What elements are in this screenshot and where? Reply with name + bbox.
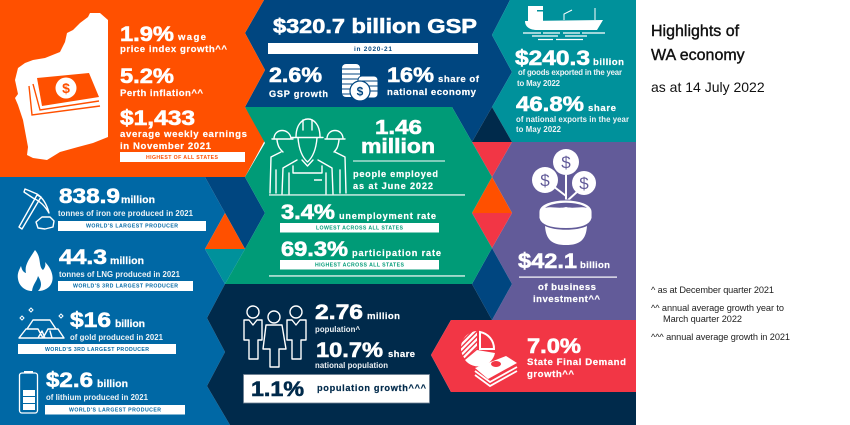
unemployment rate: LOWEST ACROSS ALL STATES xyxy=(316,226,404,232)
gold tag: WORLD'S 3RD LARGEST PRODUCER xyxy=(45,347,149,353)
icon: money plant: $ xyxy=(540,171,550,190)
population: million xyxy=(367,311,400,322)
LNG: million xyxy=(110,255,144,267)
goods exported: $240.3 xyxy=(515,47,590,70)
title xyxy=(651,23,745,64)
population share: share xyxy=(388,349,415,360)
state final demand xyxy=(527,335,626,380)
footnotes: March quarter 2022 xyxy=(663,314,742,324)
LNG tag: WORLD'S 3RD LARGEST PRODUCER xyxy=(73,284,178,290)
weekly earnings xyxy=(120,107,247,152)
earnings tag: HIGHEST OF ALL STATES xyxy=(146,155,219,161)
national economy share xyxy=(387,64,480,98)
population growth box: 1.1% xyxy=(251,378,304,401)
participation rate: HIGHEST ACROSS ALL STATES xyxy=(315,262,405,268)
iron ore xyxy=(58,185,194,218)
panel: purple investment xyxy=(492,142,636,320)
national economy share: 16% xyxy=(387,64,434,87)
triangles: left connector xyxy=(205,177,265,284)
wage index: wage xyxy=(177,32,206,43)
panel: blue resources xyxy=(0,177,230,425)
export share: share xyxy=(588,103,616,114)
wage index: price index growth^^ xyxy=(120,44,227,55)
gold tag xyxy=(18,344,176,354)
LNG: 44.3 xyxy=(59,246,107,269)
LNG tag xyxy=(58,281,193,291)
unemployment rate xyxy=(280,201,439,232)
GSP growth: GSP growth xyxy=(269,89,328,99)
GSP period bar xyxy=(268,43,478,54)
population xyxy=(315,301,400,334)
state final demand: 7.0% xyxy=(527,335,581,358)
icon: pie chart and cash xyxy=(461,331,517,386)
people employed: million xyxy=(361,136,435,158)
lithium tag: WORLD'S LARGEST PRODUCER xyxy=(69,408,161,414)
wage index xyxy=(120,23,227,55)
panel: orange wages xyxy=(0,0,265,177)
business investment: investment^^ xyxy=(533,294,600,305)
people employed xyxy=(353,117,445,191)
business investment: billion xyxy=(580,260,610,271)
GSP heading: $320.7 billion GSP xyxy=(273,16,477,38)
panel: green employment xyxy=(225,107,492,284)
icon: battery xyxy=(20,371,38,413)
iron ore: 838.9 xyxy=(59,185,120,208)
participation rate: participation rate xyxy=(352,248,441,258)
weekly earnings: average weekly earnings xyxy=(120,129,247,140)
inflation: Perth inflation^^ xyxy=(120,88,203,99)
GSP growth: 2.6% xyxy=(269,64,322,87)
inflation: 5.2% xyxy=(120,65,174,88)
GSP period bar: in 2020-21 xyxy=(354,46,392,53)
icon: flame xyxy=(18,250,53,291)
people employed: 1.46 xyxy=(375,117,422,139)
icon: coins: $ xyxy=(357,84,364,98)
export share: 46.8% xyxy=(516,93,584,116)
wage index: 1.9% xyxy=(120,23,174,46)
lithium: billion xyxy=(97,378,128,390)
icon: people xyxy=(244,306,306,367)
weekly earnings: $1,433 xyxy=(120,107,195,130)
footnotes: ^ as at December quarter 2021 xyxy=(651,285,774,295)
gold: of gold produced in 2021 xyxy=(70,333,164,342)
export share xyxy=(516,93,629,134)
panel: red state final demand xyxy=(431,320,636,392)
unemployment rate: unemployment rate xyxy=(339,211,436,221)
lithium: $2.6 xyxy=(46,369,93,392)
gold: billion xyxy=(115,318,145,330)
icon: pickaxe and ore xyxy=(19,189,54,229)
goods exported: billion xyxy=(593,57,624,68)
iron ore: million xyxy=(121,194,155,206)
population growth box xyxy=(244,374,430,403)
population growth box: population growth^^^ xyxy=(317,383,427,393)
title: WA economy xyxy=(651,47,745,64)
icon: coins xyxy=(342,64,378,101)
goods exported: to May 2022 xyxy=(517,79,561,88)
icon: WA map with money xyxy=(15,13,108,160)
population: 2.76 xyxy=(315,301,363,324)
footnotes: ^^ annual average growth year to xyxy=(651,303,784,313)
icon: ship xyxy=(523,6,605,40)
business investment: of business xyxy=(538,282,596,293)
inflation xyxy=(120,65,203,99)
footnotes: ^^^ annual average growth in 2021 xyxy=(651,332,790,342)
lithium xyxy=(46,369,149,402)
export share: of national exports in the year xyxy=(516,115,629,124)
people employed: as at June 2022 xyxy=(353,181,433,191)
iron ore tag: WORLD'S LARGEST PRODUCER xyxy=(86,224,178,230)
business investment xyxy=(518,250,617,305)
icon: workers xyxy=(270,119,346,194)
goods exported: of goods exported in the year xyxy=(518,68,622,77)
gold xyxy=(70,309,164,342)
LNG xyxy=(59,246,181,279)
title: Highlights of xyxy=(651,23,740,40)
panel: teal exports xyxy=(492,0,636,142)
icon: money plant: $ xyxy=(561,153,571,172)
population share xyxy=(315,339,415,370)
iron ore: tonnes of iron ore produced in 2021 xyxy=(58,209,194,218)
panel: dark population xyxy=(207,284,636,425)
national economy share: share of xyxy=(438,74,480,85)
unemployment rate: 3.4% xyxy=(281,201,335,224)
icon: gold bars xyxy=(19,308,64,338)
population share: 10.7% xyxy=(316,339,383,362)
state final demand: State Final Demand xyxy=(527,357,626,368)
gold: $16 xyxy=(70,309,111,332)
iron ore tag xyxy=(58,221,206,231)
state final demand: growth^^ xyxy=(527,369,574,380)
export share: to May 2022 xyxy=(516,125,562,134)
business investment: $42.1 xyxy=(518,250,577,273)
triangles: right connector xyxy=(472,107,512,320)
participation rate xyxy=(280,238,441,270)
icon: money plant: $ xyxy=(579,174,589,193)
subtitle: as at 14 July 2022 xyxy=(651,79,765,95)
goods exported xyxy=(515,47,624,88)
GSP growth xyxy=(269,64,328,99)
footnotes xyxy=(651,285,790,342)
lithium: of lithium produced in 2021 xyxy=(46,393,149,402)
lithium tag xyxy=(45,405,185,414)
icon: money plant xyxy=(532,149,596,245)
population: population^ xyxy=(315,325,360,334)
participation rate: 69.3% xyxy=(281,238,348,261)
earnings tag xyxy=(120,152,245,162)
panel: navy GSP xyxy=(245,0,512,142)
people employed: people employed xyxy=(353,169,438,179)
LNG: tonnes of LNG produced in 2021 xyxy=(59,270,181,279)
national economy share: national economy xyxy=(387,87,477,98)
population share: national population xyxy=(315,361,388,370)
weekly earnings: in November 2021 xyxy=(120,141,212,152)
icon: WA map with money: $ xyxy=(62,80,70,96)
